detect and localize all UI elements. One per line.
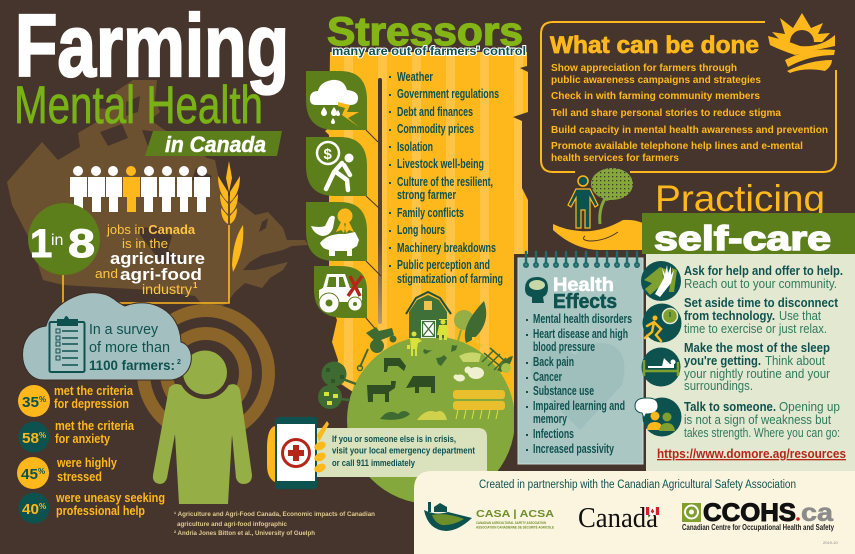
- heading banner: self-care: [642, 213, 855, 258]
- panel: health effects notebook: [514, 252, 646, 473]
- list: stressors: Machinery breakdowns: [397, 241, 496, 255]
- heading: Health Effects: Health: [553, 275, 614, 296]
- heart watermark: [531, 343, 624, 430]
- connector lines: [366, 130, 381, 332]
- list: stressors: Long hours: [397, 223, 445, 237]
- title banner: in Canada: in Canada: [165, 132, 266, 157]
- text: actions: Show appreciation for farmers through: [551, 63, 737, 74]
- stat: 58% anxiety: 58: [22, 431, 39, 447]
- stat: 40% uneasy: professional help: [56, 504, 145, 518]
- text: disconnect: [684, 295, 839, 336]
- icon: barn: [406, 292, 451, 338]
- text: ask for help: [684, 263, 843, 291]
- icon: exercise and clock: [642, 304, 682, 342]
- list: stressors: strong farmer: [397, 188, 456, 202]
- text: talk to someone: Opening up: [779, 399, 840, 414]
- text: actions: public awareness campaigns and strategies: [551, 75, 761, 86]
- panel: partners footer: [414, 471, 855, 554]
- icon: helping hand: [641, 261, 681, 301]
- list: stressors: Commodity prices: [397, 122, 474, 136]
- list: stressors: stigmatization of farming: [397, 272, 503, 286]
- list: stressors: Government regulations: [397, 87, 499, 101]
- list: health effects: Infections: [533, 427, 574, 441]
- stat: 35% depression: 35: [22, 395, 39, 411]
- timeline bar: [378, 78, 382, 324]
- list: health effects: memory: [533, 412, 567, 426]
- icon panel: debt: $: [324, 146, 332, 163]
- stat: 45% stressed: %: [38, 467, 45, 476]
- list: health effects: Impaired learning and: [533, 399, 625, 413]
- stat circle: 1 in 8: [28, 203, 100, 275]
- icon panel: machinery: [314, 266, 367, 318]
- panel: light self-care background: [643, 254, 855, 474]
- icon: bed: [642, 348, 680, 386]
- icons: chickens and pig: [423, 343, 481, 366]
- map of Canada: [7, 80, 308, 318]
- icon: talking people: [635, 398, 682, 436]
- stat: 58% anxiety: met the criteria: [55, 419, 135, 433]
- text: emergency message: [332, 434, 476, 469]
- stat: 58% anxiety: [18, 419, 135, 452]
- text: disconnect: Set aside time to disconnect: [684, 295, 839, 310]
- text: survey: of more than: [89, 339, 170, 356]
- target rings: [144, 310, 268, 436]
- text: disconnect: Use that: [779, 308, 821, 323]
- logo: CCOHS.ca: ca: [801, 499, 834, 527]
- text: sleep: surroundings.: [684, 378, 753, 393]
- text: jobs statistic: is in the: [122, 236, 168, 251]
- text: talk to someone: [684, 399, 840, 440]
- icon: big tree: [454, 301, 486, 343]
- notebook rings: [524, 252, 639, 267]
- text: jobs statistic: agriculture: [110, 249, 205, 268]
- stat: 45% stressed: were highly: [56, 456, 117, 470]
- stat: 35% depression: met the criteria: [54, 384, 134, 398]
- heading: Stressors: Stressors: [327, 10, 523, 54]
- list: health effects: Increased passivity: [533, 442, 614, 456]
- text: jobs statistic: jobs in Canada: [106, 222, 196, 237]
- stat circle: 1 in 8: 8: [68, 222, 95, 266]
- heading: Health Effects: [553, 275, 617, 313]
- text: jobs statistic: and: [95, 266, 118, 281]
- icon: tractor: [358, 327, 396, 370]
- text: emergency message: or call 911 immediately: [332, 458, 416, 469]
- icon panel: livestock: [306, 202, 367, 261]
- stat circle: 1 in 8: in: [51, 232, 63, 249]
- title: Mental Health: Mental Health: [14, 76, 263, 135]
- stat: 45% stressed: [17, 456, 117, 489]
- icon: clipboard: [50, 316, 84, 372]
- stat: 40% uneasy: %: [39, 502, 46, 511]
- logo: Canada wordmark: Canada: [578, 503, 659, 534]
- logo: CCOHS.ca: CCOHS: [703, 499, 796, 527]
- text: sleep: Make the most of the sleep: [684, 340, 830, 355]
- stat: 58% anxiety: %: [39, 431, 46, 440]
- icon: row of eight workers: [70, 166, 210, 212]
- text: ask for help: Reach out to your community.: [684, 276, 837, 291]
- emergency callout: [267, 417, 487, 489]
- text: talk to someone: is not a sign of weakness but: [684, 412, 831, 427]
- list: health effects: Cancer: [533, 370, 562, 384]
- text: jobs statistic: [95, 222, 205, 297]
- list: stressors: Public perception and: [397, 258, 490, 272]
- text: actions: Check in with farming community members: [551, 91, 760, 102]
- text: sleep: [684, 340, 831, 393]
- stat: 40% uneasy: were uneasy seeking: [55, 491, 165, 505]
- farm hill illustration: [318, 292, 515, 504]
- list: health effects: Mental health disorders: [533, 312, 632, 326]
- icon panel: weather: [306, 71, 367, 130]
- icon: head with brain: [525, 277, 548, 303]
- icon: sun over fields: [768, 13, 835, 73]
- footnotes: [174, 511, 375, 537]
- document code: 2019-10: [823, 540, 838, 545]
- logo: CASA ACSA: CASA | ACSA: [476, 509, 554, 520]
- text: survey: 2: [177, 359, 181, 366]
- icon: farmers: [407, 319, 449, 356]
- text: jobs statistic: 1: [193, 281, 198, 290]
- heading: Health Effects: Effects: [553, 291, 617, 313]
- text: actions: health services for farmers: [551, 153, 679, 164]
- list: stressors: Family conflicts: [397, 206, 464, 220]
- icons: small fence and crops: [472, 337, 513, 373]
- stat: 40% uneasy: [18, 491, 165, 524]
- stat: 35% depression: %: [39, 395, 46, 404]
- footnotes: agriculture and agri-food infographic: [177, 521, 287, 528]
- yellow field panel: [325, 52, 528, 420]
- stat: 40% uneasy: 40: [22, 502, 39, 518]
- icon: wheat: [218, 161, 243, 272]
- text: actions: Tell and share personal stories to reduce stigma: [551, 108, 781, 119]
- stat: 35% depression: for depression: [54, 397, 129, 411]
- stat: 35% depression: [18, 384, 134, 417]
- list: stressors: Debt and finances: [397, 105, 473, 119]
- footnotes: ¹ Agriculture and Agri-Food Canada, Economic impacts of Canadian: [174, 511, 375, 518]
- text: disconnect: from technology.: [684, 308, 775, 323]
- list: stressors: Livestock well-being: [397, 157, 484, 171]
- list: stressors: Weather: [397, 70, 433, 84]
- text: actions: [551, 63, 828, 164]
- icon panel: debt: [306, 137, 367, 196]
- text: jobs statistic: agri-food: [120, 265, 202, 284]
- heading: Practicing: Practicing: [655, 178, 825, 219]
- icon: phone in hand: [267, 417, 329, 489]
- list: health effects: blood pressure: [533, 340, 595, 354]
- text: survey: [89, 321, 181, 373]
- text: jobs statistic: industry: [142, 281, 192, 297]
- figure: person: [153, 345, 252, 504]
- text: sleep: your nightly routine and your: [684, 366, 831, 381]
- icons: crop rows: [380, 390, 505, 420]
- text: sleep: you're getting.: [684, 353, 761, 368]
- subheading: many are out of farmers' control: [332, 46, 526, 58]
- text: disconnect: time to exercise or just relax.: [684, 321, 827, 336]
- text: survey: 1100 farmers:: [89, 357, 175, 373]
- heading: What can be done: [550, 32, 759, 59]
- text: survey: In a survey: [89, 321, 158, 338]
- text: sleep: Think about: [765, 353, 825, 368]
- logo: CASA ACSA: [424, 502, 555, 531]
- stat: 58% anxiety: for anxiety: [55, 432, 110, 446]
- list: health effects: Heart disease and high: [533, 327, 628, 341]
- text: partnership: Created in partnership with the Canadian Agricultural Safety Association: [479, 479, 796, 491]
- text: emergency message: visit your local emergency department: [332, 446, 476, 456]
- icons: sheep: [454, 366, 484, 382]
- stat: 45% stressed: 45: [21, 467, 38, 483]
- frame around jobs statistic: [63, 225, 229, 303]
- list: stressors: Isolation: [397, 140, 433, 154]
- icon: person and tree in hand: [553, 168, 645, 250]
- panel: what can be done: [541, 13, 836, 172]
- survey cloud: [22, 293, 191, 380]
- list: health effects: Back pain: [533, 355, 574, 369]
- text: actions: Build capacity in mental health awareness and prevention: [551, 125, 828, 136]
- text: talk to someone: Talk to someone.: [684, 399, 776, 414]
- logo: CASA ACSA: CANADIAN AGRICULTURAL SAFETY ASSOCIATION: [476, 521, 546, 525]
- heading banner: self-care: self-care: [654, 220, 831, 258]
- text: actions: Promote available telephone help lines and e-mental: [551, 141, 803, 152]
- logo: CCOHS.ca: [682, 499, 834, 532]
- icons: cows: [367, 358, 435, 402]
- list: stressors: [389, 70, 503, 286]
- icon: trees: [318, 362, 356, 409]
- stat: 45% stressed: stressed: [57, 470, 102, 484]
- stat circle: 1 in 8: 1: [30, 222, 52, 266]
- list: stressors: Culture of the resilient,: [397, 175, 493, 189]
- logo: CASA ACSA: ASSOCIATION CANADIENNE DE SÉCURITÉ AGRICOLE: [476, 524, 555, 530]
- list: health effects: Substance use: [533, 384, 594, 398]
- text: emergency message: If you or someone else is in crisis,: [332, 434, 456, 445]
- list: health effects: [526, 312, 632, 456]
- footnotes: ² Andria Jones Bitton et al., University of Guelph: [174, 530, 315, 537]
